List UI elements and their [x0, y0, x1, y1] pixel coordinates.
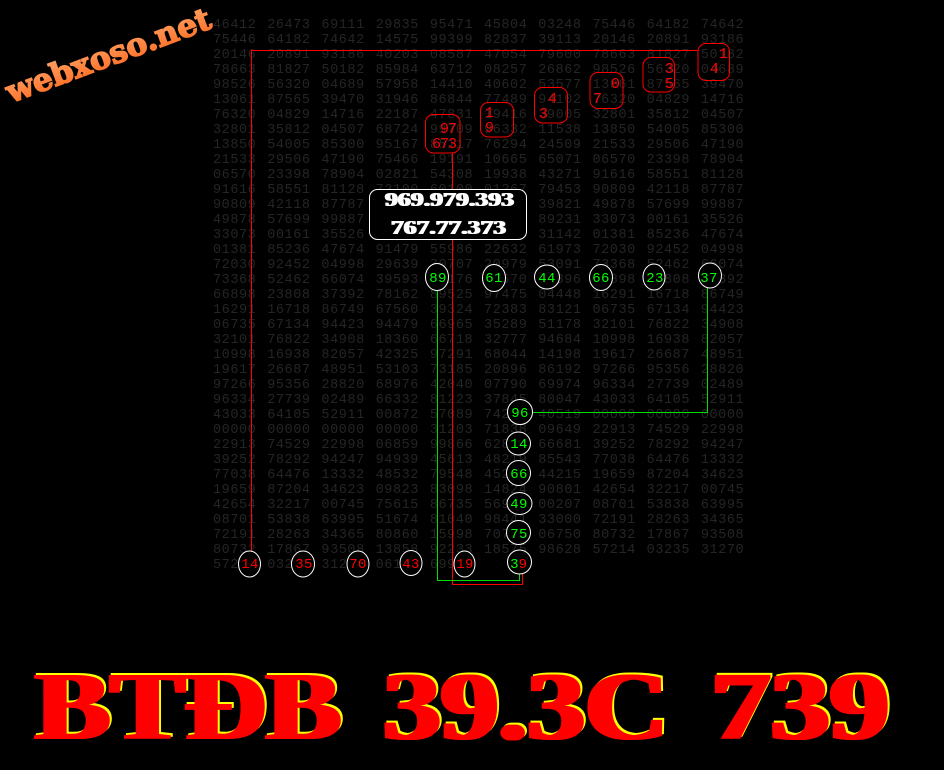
result callout: 767.77.373 — [391, 217, 506, 239]
number grid: 78663 81827 50182 85984 63712 08257 26862 98526 56320 04689 — [213, 63, 744, 78]
box 3: 3 — [539, 106, 548, 123]
number grid: 80732 17867 93508 13858 92233 18575 98628 57214 03235 31270 — [213, 543, 744, 558]
number grid: 20146 20891 93186 40203 08587 47054 79600 78663 81827 50182 — [213, 48, 744, 63]
number grid: 13850 54005 85300 95167 85117 76294 24509 21533 29506 47190 — [213, 138, 744, 153]
number grid: 00000 00000 00000 00000 31203 71838 09649 22913 74529 22998 — [213, 423, 744, 438]
result callout: 969.979.393 — [385, 189, 514, 211]
horizontal row of green circled numbers: 44 — [538, 271, 556, 287]
bottom row of red circled numbers: 14 — [241, 557, 259, 573]
number grid: 73368 52462 66074 39593 88176 65670 48896 66898 23808 37392 — [213, 273, 744, 288]
number grid: 19617 26687 48951 53103 73185 20896 86192 97266 95356 28820 — [213, 363, 744, 378]
bottom row of red circled numbers: 43 — [402, 557, 420, 573]
box 2: 1 — [485, 105, 494, 122]
box 3 — [534, 88, 568, 123]
box 6 — [698, 44, 730, 80]
title: BTĐB 39.3C 739: BTĐB — [35, 653, 341, 760]
number grid: 57214 03235 31270 06143 69919 — [213, 558, 473, 573]
vertical column of green circled numbers: 9 — [519, 557, 527, 573]
number grid: 10998 16938 82057 42325 97291 68044 14198 19617 26687 48951 — [213, 348, 744, 363]
title: BTĐB 39.3C 739: 39.3C — [383, 653, 668, 760]
number grid: 91616 58551 81128 72100 60100 01267 79453 90809 42118 87787 — [213, 183, 744, 198]
number grid: 75446 64182 74642 14575 99399 82837 39113 20146 20891 93186 — [213, 33, 744, 48]
number grid: 22913 74529 22998 06859 99866 62814 66681 39252 78292 94247 — [213, 438, 744, 453]
box 2: 9 — [485, 120, 494, 137]
box 1: 97 — [440, 121, 457, 138]
horizontal row of green circled numbers: 89 — [429, 271, 447, 287]
number grid: 16291 16718 86749 67560 39324 72383 83121 06735 67134 94423 — [213, 303, 744, 318]
title: BTĐB 39.3C 739: BTĐB — [37, 651, 343, 758]
box 4: 0 — [611, 76, 620, 93]
number grid: 06570 23398 78904 02821 54308 19938 43271 91616 58551 81128 — [213, 168, 744, 183]
title: BTĐB 39.3C 739: 739 — [713, 651, 891, 758]
bottom row of red circled numbers: 70 — [349, 557, 367, 573]
number grid: 19659 87204 34623 09823 83098 14824 90801 42654 32217 00745 — [213, 483, 744, 498]
box 3: 4 — [548, 91, 557, 108]
number grid: 76320 04829 14716 22187 47831 19416 39005 32801 35812 04507 — [213, 108, 744, 123]
vertical column of green circled numbers: 66 — [510, 467, 528, 483]
box 5: 3 — [665, 61, 674, 78]
number grid: 08701 53838 63995 51674 81040 98441 33000 72191 28263 34365 — [213, 513, 744, 528]
number grid: 33073 00161 35526 47674 91479 55986 31142 01381 85236 47674 — [213, 228, 744, 243]
box 6: 4 — [710, 61, 719, 78]
number grid: 46412 26473 69111 29835 95471 45804 03248 75446 64182 74642 — [213, 18, 744, 33]
number grid: 97266 95356 28820 68976 42040 07790 69974 96334 27739 02489 — [213, 378, 744, 393]
vertical column of green circled numbers: 49 — [510, 497, 528, 513]
vertical column of green circled numbers: 75 — [510, 527, 528, 543]
box 4 — [590, 72, 623, 108]
bottom row of red circled numbers — [238, 550, 475, 577]
box 1: 673 — [432, 136, 457, 153]
number grid: 32801 35812 04507 68724 99709 96332 11538 13850 54005 85300 — [213, 123, 744, 138]
bottom row of red circled numbers: 19 — [456, 557, 474, 573]
number grid: 90809 42118 87787 75466 19191 10665 39821 49878 57699 99887 — [213, 198, 744, 213]
box 5: 5 — [665, 76, 674, 93]
horizontal row of green circled numbers: 61 — [485, 271, 503, 287]
horizontal row of green circled numbers: 37 — [700, 271, 718, 287]
title: BTĐB 39.3C 739: 739 — [711, 653, 889, 760]
number grid: 49878 57699 99887 91479 55986 22632 89231 33073 00161 35526 — [213, 213, 744, 228]
vertical column of green circled numbers: 14 — [510, 437, 528, 453]
horizontal row of green circled numbers: 23 — [646, 271, 664, 287]
title: BTĐB 39.3C 739: 39.3C — [385, 651, 670, 758]
vertical column of green circled numbers: 96 — [511, 406, 529, 422]
title: BTĐB 39.3C 739 — [35, 651, 891, 760]
box 1 — [426, 114, 460, 153]
highlighted digit boxes — [426, 44, 730, 153]
horizontal row of green circled numbers: 66 — [592, 271, 610, 287]
number grid: 72030 92452 04998 29639 30707 20979 53091 73368 52462 66074 — [213, 258, 744, 273]
number grid: 98526 56320 04689 57958 14410 40602 53577 13061 87565 39470 — [213, 78, 744, 93]
box 5 — [643, 58, 674, 93]
number grid: 39252 78292 94247 94939 45613 48219 85543 77038 64476 13332 — [213, 453, 744, 468]
number grid: 43033 64105 52911 00872 57089 74296 40519 00000 00000 00000 — [213, 408, 744, 423]
number grid: 32101 76822 34908 18360 66718 32777 94684 10998 16938 82057 — [213, 333, 744, 348]
number grid: 96334 27739 02489 66332 81223 37845 80047 43033 64105 52911 — [213, 393, 744, 408]
red connector lines — [252, 50, 698, 584]
number grid: 21533 29506 47190 75466 19191 10665 65071 06570 23398 78904 — [213, 153, 744, 168]
horizontal row of green circled numbers — [426, 263, 722, 292]
number grid: 66898 23808 37392 78162 89525 97475 04448 16291 16718 86749 — [213, 288, 744, 303]
number grid: 01381 85236 47674 91479 55986 22632 61973 72030 92452 04998 — [213, 243, 744, 258]
number grid: 42654 32217 00745 75615 86735 56949 00207 08701 53838 63995 — [213, 498, 744, 513]
logo: webxoso.net: webxoso.net — [0, 1, 217, 111]
box 6: 1 — [719, 46, 728, 63]
box 4: 7 — [593, 91, 602, 108]
result callout — [370, 189, 526, 240]
number grid: 13061 87565 39470 31946 86844 77489 94102 76320 04829 14716 — [213, 93, 744, 108]
vertical column of green circled numbers: 3 — [510, 557, 519, 573]
number grid: 77038 64476 13332 48532 79548 45266 44215 19659 87204 34623 — [213, 468, 744, 483]
number grid — [213, 18, 744, 573]
bottom row of red circled numbers: 35 — [295, 557, 313, 573]
box 2 — [480, 102, 514, 137]
green connector lines — [438, 287, 708, 580]
vertical column of green circled numbers — [506, 400, 532, 574]
number grid: 06735 67134 94423 94479 66965 35289 51178 32101 76822 34908 — [213, 318, 744, 333]
number grid: 72191 28263 34365 80860 15998 70775 06750 80732 17867 93508 — [213, 528, 744, 543]
